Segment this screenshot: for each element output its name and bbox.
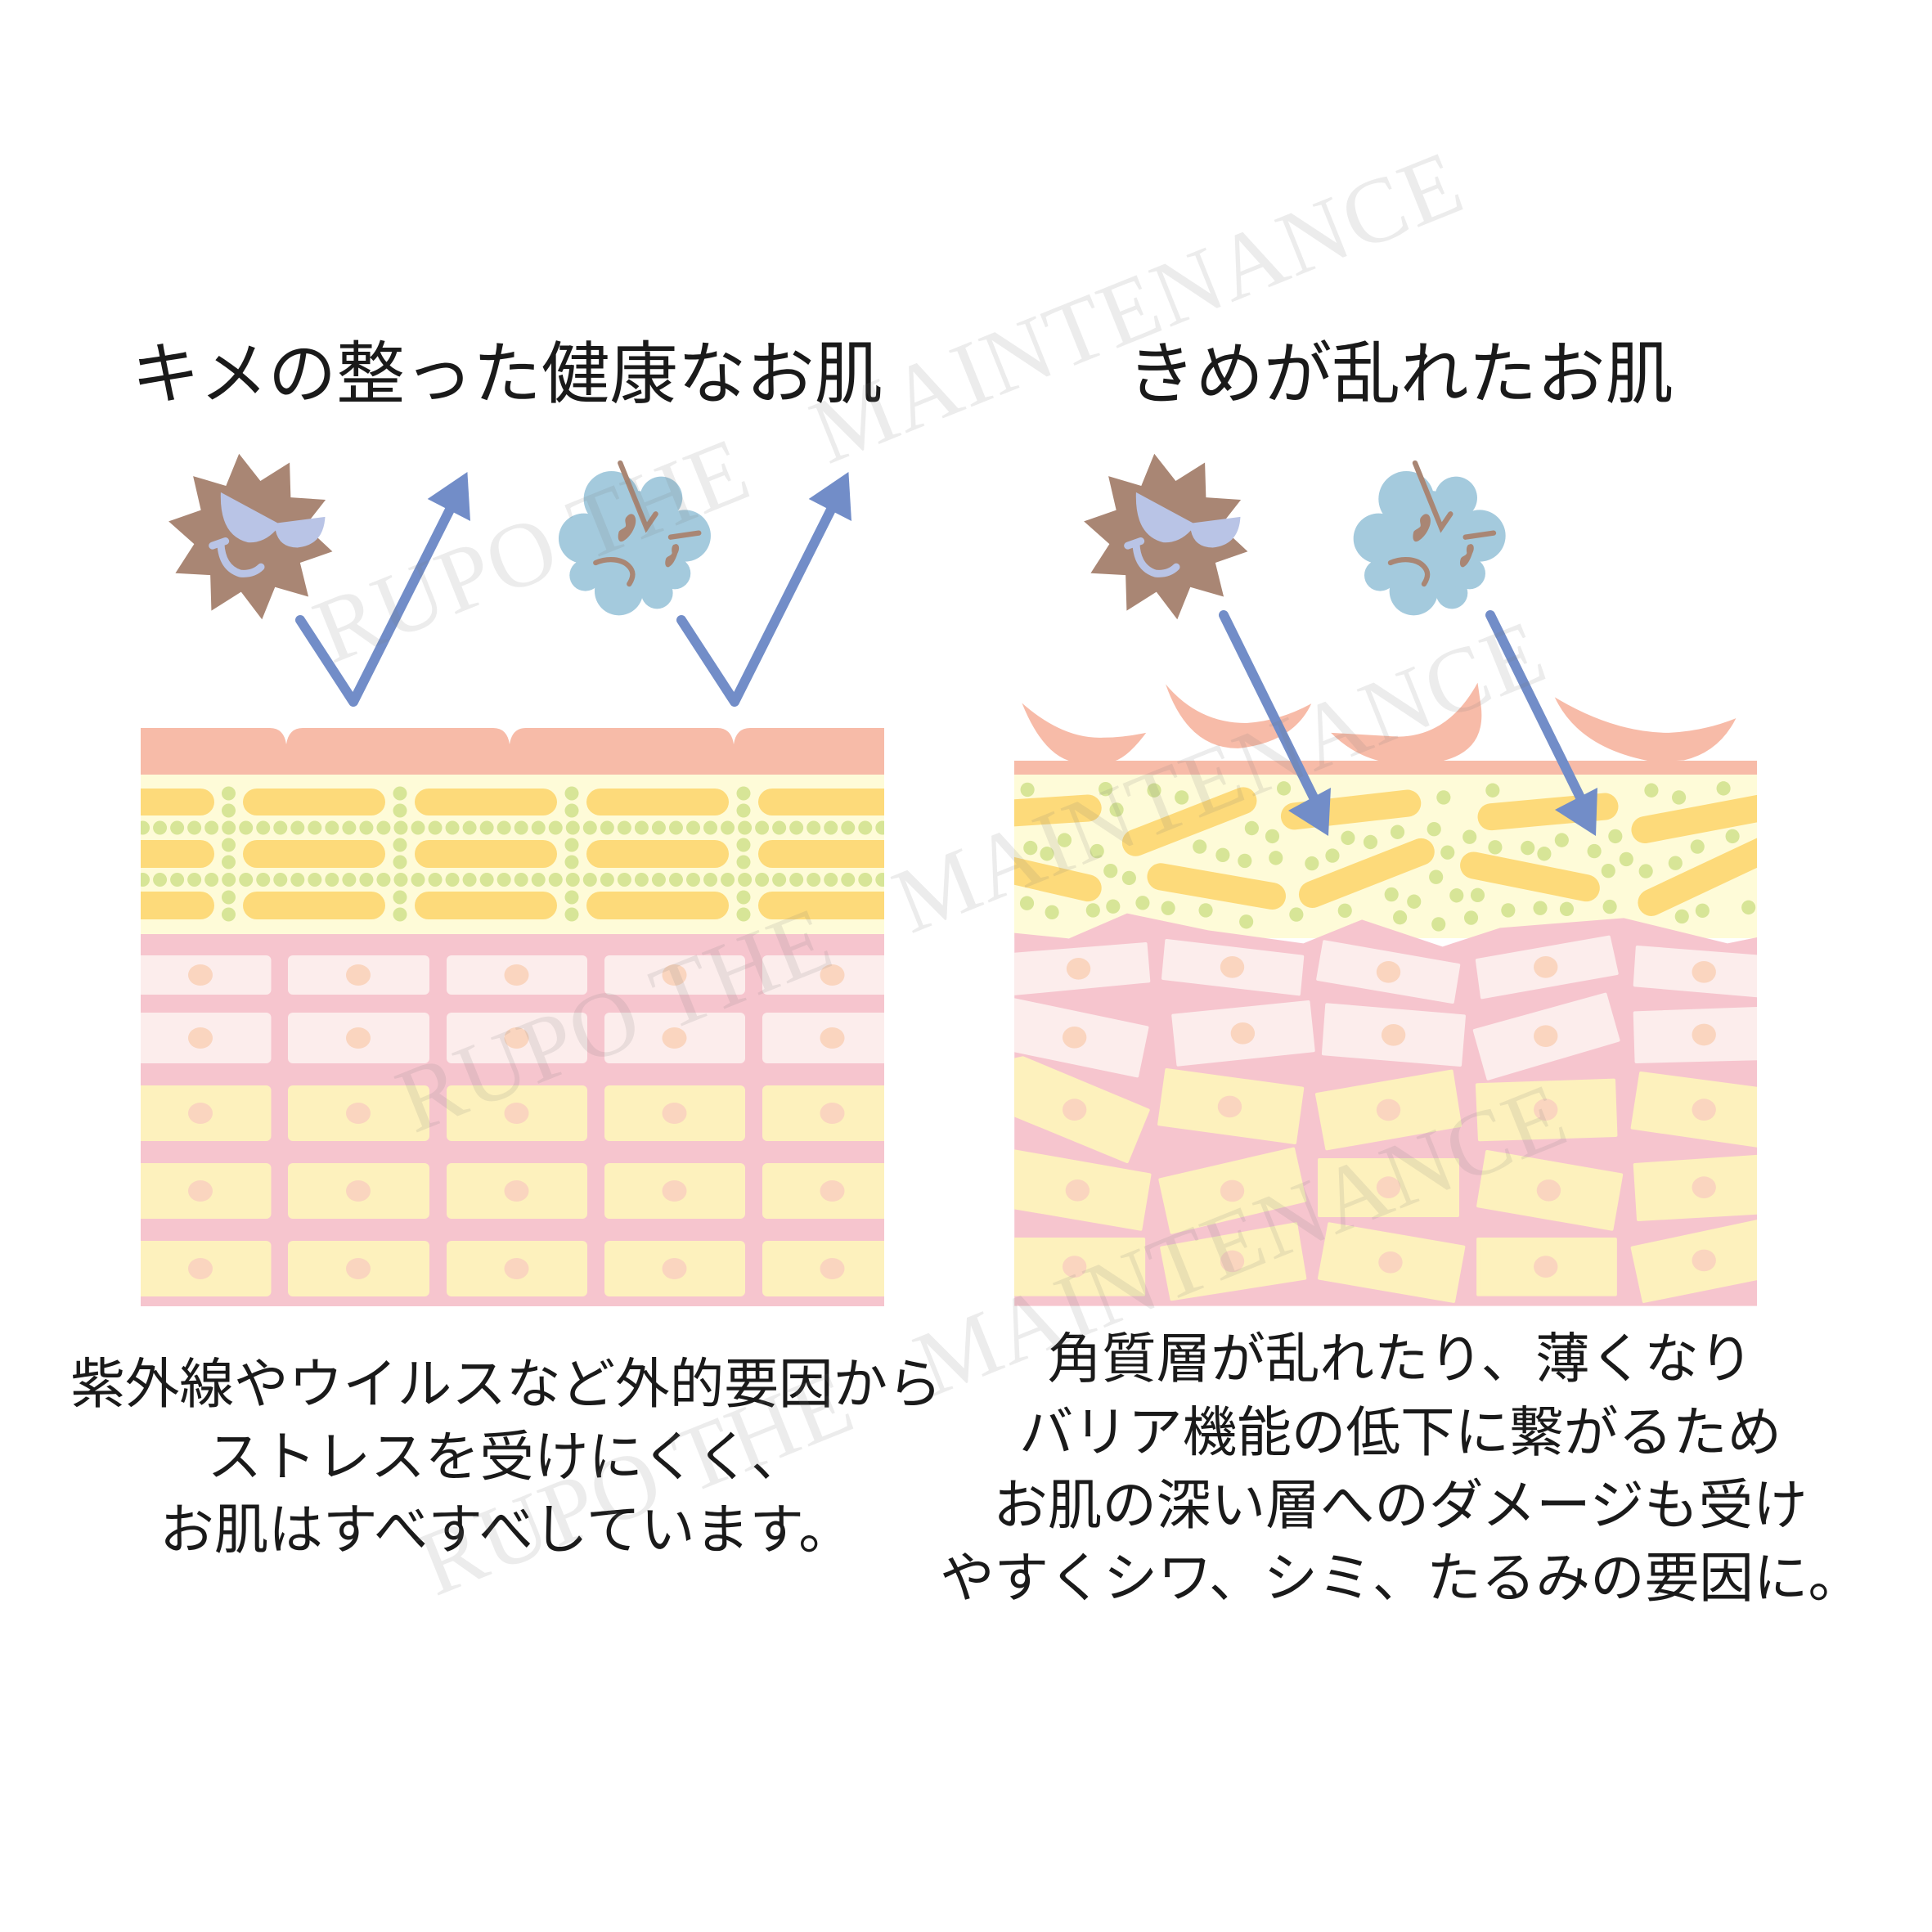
lipid layer background — [1014, 775, 1757, 938]
moisture dots — [126, 787, 900, 921]
disordered pale cells — [1008, 937, 1764, 1079]
lipid layer background — [141, 775, 887, 934]
scattered moisture dots — [1020, 781, 1755, 932]
panel: disturbed skin cross-section — [983, 761, 1799, 1306]
lower yellow cells — [123, 1085, 910, 1296]
disordered yellow cells — [1008, 1058, 1764, 1301]
text block: healthy skin description: ストレスを受けにくく、 — [207, 1427, 806, 1488]
upper pale cells — [123, 955, 910, 1063]
icon: virus right — [1354, 463, 1506, 615]
text block: disturbed skin description: 角質層が乱れたり、薄くなり — [1047, 1329, 1754, 1390]
peeling skin flakes — [1022, 683, 1736, 762]
ceramide bars — [115, 789, 922, 919]
title: healthy skin: キメの整った健康なお肌 — [132, 335, 883, 412]
icon: UV sun left — [168, 454, 332, 619]
text block: disturbed skin description: やすくシワ、シミ、たるみの要因に。 — [940, 1548, 1862, 1609]
text block: disturbed skin description — [940, 1329, 1862, 1609]
text block: disturbed skin description: お肌の深い層へのダメージも受け — [993, 1476, 1808, 1536]
arrow: UV penetrating — [1224, 615, 1331, 836]
text block: healthy skin description: 紫外線やウイルスなど外的要因から — [70, 1355, 942, 1415]
text block: healthy skin description — [70, 1355, 942, 1561]
text block: disturbed skin description: バリア機能の低下に繋がるため — [1019, 1403, 1781, 1463]
skin surface layer — [141, 728, 887, 775]
epidermis background — [1014, 914, 1757, 1306]
watermark 2: RUPO THE MAINTENANCE — [384, 600, 1559, 1152]
arrow: reflected UV — [300, 472, 470, 702]
cell nuclei — [188, 964, 844, 1279]
skin line — [1014, 761, 1757, 775]
scattered ceramide bars — [983, 801, 1799, 902]
arrow: virus penetrating — [1490, 615, 1597, 836]
panel: healthy skin cross-section — [115, 728, 922, 1306]
watermark 1: RUPO THE MAINTENANCE — [301, 131, 1476, 683]
icon: UV sun right — [1084, 454, 1247, 619]
epidermis background — [141, 934, 887, 1306]
arrow: reflected virus — [681, 472, 851, 702]
text block: healthy skin description: お肌はすべすべしています。 — [160, 1500, 853, 1561]
disordered cell nuclei — [1063, 956, 1716, 1278]
watermark 3: RUPO THE MAINTENANCE — [405, 1063, 1580, 1615]
icon: virus left — [559, 463, 711, 615]
title: disturbed skin: きめが乱れたお肌 — [1127, 335, 1674, 412]
